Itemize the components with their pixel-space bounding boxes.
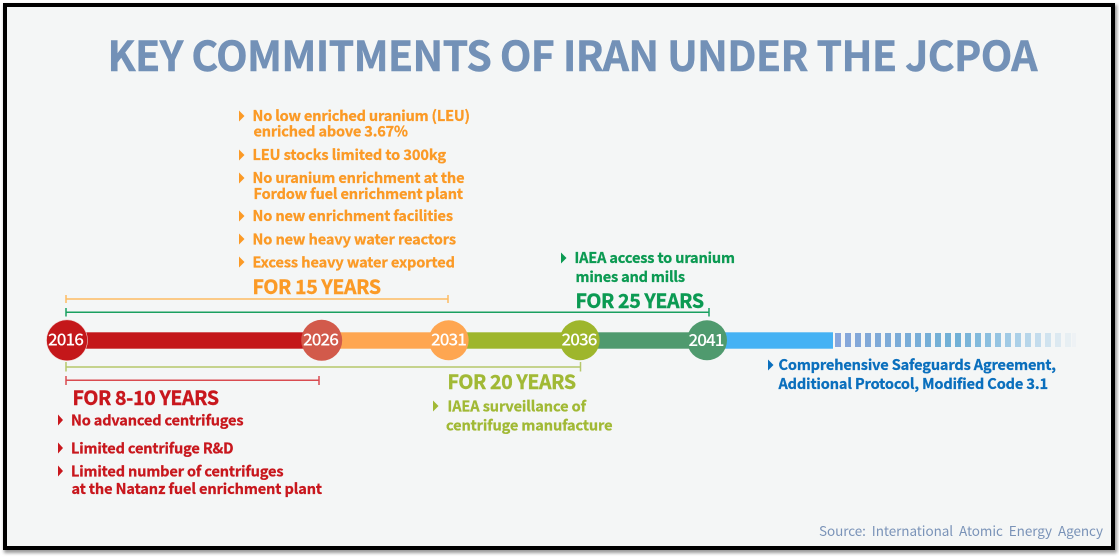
node: 2016 <box>46 320 88 361</box>
bracket: 25 years <box>66 308 709 316</box>
panel: olive 20-year commitments <box>433 366 612 436</box>
bullet text: green: mines and mills <box>576 266 685 287</box>
bar: blue segment <box>707 332 833 349</box>
bullet text: olive <box>433 396 612 436</box>
panel: orange 15-year commitments <box>239 105 470 300</box>
bracket: 20 years <box>66 362 580 372</box>
bracket: 15 years <box>66 295 448 303</box>
bullet text: green <box>561 247 735 287</box>
node: 2031: 2031 <box>431 326 467 350</box>
node: 2041 <box>687 320 727 360</box>
bracket: 8-10 years <box>66 376 319 385</box>
timeline <box>46 320 1076 361</box>
node: 2026: 2026 <box>303 326 339 350</box>
bar: fading dashes <box>835 333 1076 347</box>
bullet list: orange: enriched above 3.67% <box>254 120 408 142</box>
node: 2036: 2036 <box>562 326 598 350</box>
node: 2026 <box>301 320 342 361</box>
panel: green 25-year commitments <box>561 247 735 314</box>
panel: red 8-10 year commitments <box>58 382 322 499</box>
bullet text: olive: IAEA surveillance of <box>448 396 587 416</box>
heading: for 8-10 years: FOR 8-10 YEARS <box>72 382 219 411</box>
bullet text: olive: centrifuge manufacture <box>446 414 612 436</box>
heading: for 15 years: FOR 15 YEARS <box>252 271 381 300</box>
bullet list: orange: LEU stocks limited to 300kg <box>252 144 446 165</box>
source note: Source: International Atomic Energy Agency <box>819 520 1103 540</box>
bullet list: red: Limited centrifuge R&D <box>71 438 234 458</box>
bar: olive segment <box>449 332 580 349</box>
bullet list: orange: Excess heavy water exported <box>252 252 455 272</box>
bullet list: red: at the Natanz fuel enrichment plant <box>72 478 322 499</box>
bullet list: orange: No uranium enrichment at the <box>252 167 464 188</box>
bullet list: red: Limited number of centrifuges <box>71 460 284 482</box>
panel: blue permanent commitments <box>768 354 1056 394</box>
bar: orange segment <box>322 332 449 349</box>
bullet list: red: No advanced centrifuges <box>71 410 244 430</box>
bullet list: orange: No new heavy water reactors <box>252 228 456 250</box>
node: 2031 <box>429 320 469 360</box>
bullet text: green: IAEA access to uranium <box>574 247 735 268</box>
bullet list: orange: No low enriched uranium (LEU) <box>252 105 470 126</box>
panel: blue permanent commitments: Comprehensive Safeguards Agreement, <box>778 354 1056 375</box>
title: KEY COMMITMENTS OF IRAN UNDER THE JCPOA <box>108 23 1038 83</box>
node: 2016: 2016 <box>48 326 84 350</box>
panel: blue permanent commitments: Additional Protocol, Modified Code 3.1 <box>778 373 1048 394</box>
node: 2036 <box>560 320 600 360</box>
bar: red segment <box>67 332 322 349</box>
bullet list: orange <box>239 105 470 272</box>
bullet list: red <box>58 410 322 499</box>
bullet list: orange: Fordow fuel enrichment plant <box>254 183 463 204</box>
heading: for 25 years: FOR 25 YEARS <box>576 285 704 314</box>
bar: green segment <box>580 332 707 349</box>
heading: for 20 years: FOR 20 YEARS <box>448 366 576 395</box>
node: 2041: 2041 <box>688 326 724 351</box>
bullet list: orange: No new enrichment facilities <box>252 205 453 226</box>
